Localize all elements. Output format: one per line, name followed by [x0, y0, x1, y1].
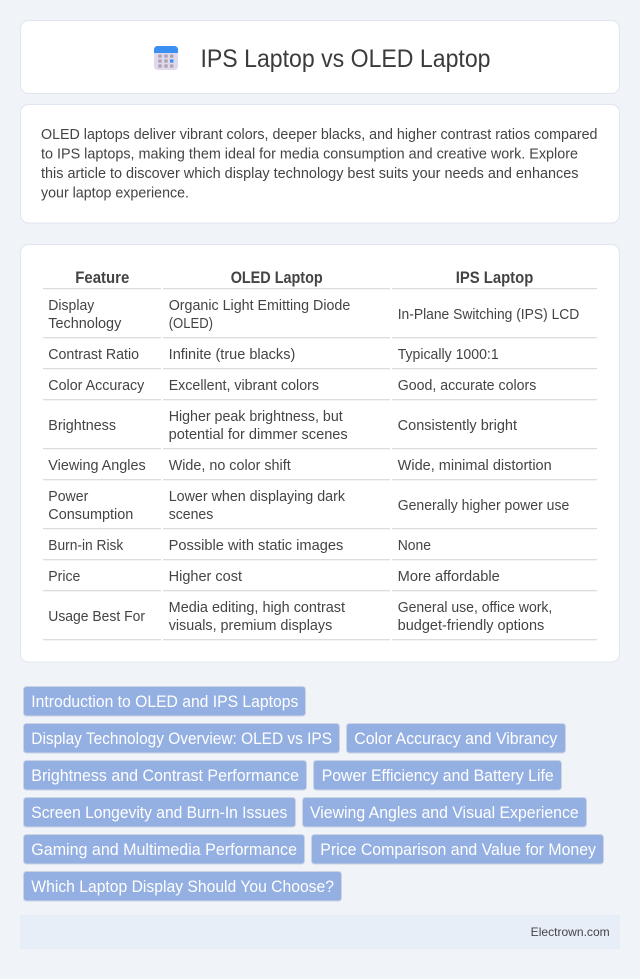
- title: IPS Laptop vs OLED Laptop: [200, 45, 490, 73]
- tag: screen longevity: Screen Longevity and Burn-In Issues: [31, 804, 287, 822]
- row: power consumption: Lower when displaying dark: [169, 489, 346, 505]
- intro text: OLED laptops deliver vibrant colors, deeper blacks, and higher contrast ratios compared: [41, 127, 598, 143]
- icon: calendar grid: [154, 46, 178, 70]
- row: brightness: [43, 409, 597, 449]
- footer: [20, 915, 620, 949]
- panel: introduction: [20, 104, 620, 223]
- row: display technology: Technology: [48, 316, 122, 332]
- tag: power efficiency: Power Efficiency and Battery Life: [322, 767, 554, 785]
- row: color accuracy: Excellent, vibrant colors: [169, 378, 319, 394]
- row: burn-in risk: Possible with static images: [169, 538, 343, 554]
- intro text: your laptop experience.: [41, 186, 189, 202]
- row: display technology: Organic Light Emitting Diode: [169, 298, 350, 314]
- row: viewing angles: Wide, no color shift: [169, 458, 291, 474]
- tag: display technology: [24, 724, 340, 753]
- row: price: Higher cost: [169, 569, 242, 585]
- row: price: Price: [48, 569, 80, 585]
- row: brightness: Higher peak brightness, but: [169, 409, 343, 425]
- row: brightness: Brightness: [48, 418, 116, 434]
- row: viewing angles: Wide, minimal distortion: [398, 458, 552, 474]
- row: contrast ratio: Typically 1000:1: [398, 347, 499, 363]
- row: viewing angles: Viewing Angles: [48, 458, 146, 474]
- row: price: [43, 569, 597, 591]
- row: viewing angles: [43, 458, 597, 480]
- row: display technology: (OLED): [169, 316, 213, 332]
- row: usage best for: Media editing, high contrast: [169, 600, 345, 616]
- row: price: More affordable: [398, 569, 500, 585]
- row: contrast ratio: Infinite (true blacks): [169, 347, 295, 363]
- row: color accuracy: Good, accurate colors: [398, 378, 536, 394]
- intro text: [41, 127, 598, 202]
- topic tags: [24, 686, 604, 901]
- tag: gaming: Gaming and Multimedia Performance: [31, 841, 297, 859]
- row: display technology: [43, 298, 597, 338]
- tag: brightness: Brightness and Contrast Performance: [31, 767, 299, 785]
- row: brightness: potential for dimmer scenes: [169, 427, 348, 443]
- table header: OLED Laptop: [231, 269, 323, 287]
- row: brightness: Consistently bright: [398, 418, 517, 434]
- row: power consumption: Generally higher power use: [398, 498, 569, 514]
- row: power consumption: [43, 489, 597, 529]
- tag: introduction: [24, 686, 306, 716]
- table header: [43, 269, 597, 289]
- tag: power efficiency: [314, 760, 562, 790]
- row: display technology: In-Plane Switching (IPS) LCD: [398, 307, 579, 323]
- intro text: this article to discover which display technology best suits your needs and enhances: [41, 166, 578, 182]
- tag: introduction: Introduction to OLED and IPS Laptops: [31, 693, 298, 711]
- table header: Feature: [75, 269, 129, 287]
- row: burn-in risk: [43, 538, 597, 560]
- row: color accuracy: [43, 378, 597, 400]
- tag: viewing angles: [302, 798, 586, 827]
- tag: price comparison: [312, 834, 604, 864]
- tag: color accuracy: Color Accuracy and Vibrancy: [354, 730, 558, 748]
- intro text: to IPS laptops, making them ideal for media consumption and creative work. Explore: [41, 146, 578, 162]
- table header: IPS Laptop: [456, 269, 533, 287]
- row: usage best for: [43, 600, 597, 640]
- tag: gaming: [24, 834, 304, 864]
- row: contrast ratio: Contrast Ratio: [48, 347, 139, 363]
- row: color accuracy: Color Accuracy: [48, 378, 145, 394]
- tag: viewing angles: Viewing Angles and Visual Experience: [310, 804, 579, 822]
- row: power consumption: Consumption: [48, 507, 133, 523]
- row: usage best for: visuals, premium displays: [169, 618, 332, 634]
- row: burn-in risk: None: [398, 538, 431, 554]
- tag: screen longevity: [24, 798, 296, 827]
- tag: display technology: Display Technology Overview: OLED vs IPS: [31, 730, 332, 748]
- row: power consumption: scenes: [169, 507, 213, 523]
- row: display technology: Display: [48, 298, 95, 314]
- row: contrast ratio: [43, 347, 597, 369]
- footer source text: Electrown.com: [531, 925, 610, 939]
- row: usage best for: budget-friendly options: [398, 618, 544, 634]
- row: usage best for: Usage Best For: [48, 609, 145, 625]
- title panel: [20, 20, 620, 94]
- row: usage best for: General use, office work,: [398, 600, 552, 616]
- tag: which display: [24, 872, 342, 901]
- tag: brightness: [24, 760, 306, 790]
- row: power consumption: Power: [48, 489, 88, 505]
- panel: comparison table: [20, 244, 620, 662]
- tag: color accuracy: [346, 724, 566, 753]
- tag: which display: Which Laptop Display Should You Choose?: [31, 878, 334, 896]
- tag: price comparison: Price Comparison and Value for Money: [320, 841, 597, 859]
- row: burn-in risk: Burn-in Risk: [48, 538, 124, 554]
